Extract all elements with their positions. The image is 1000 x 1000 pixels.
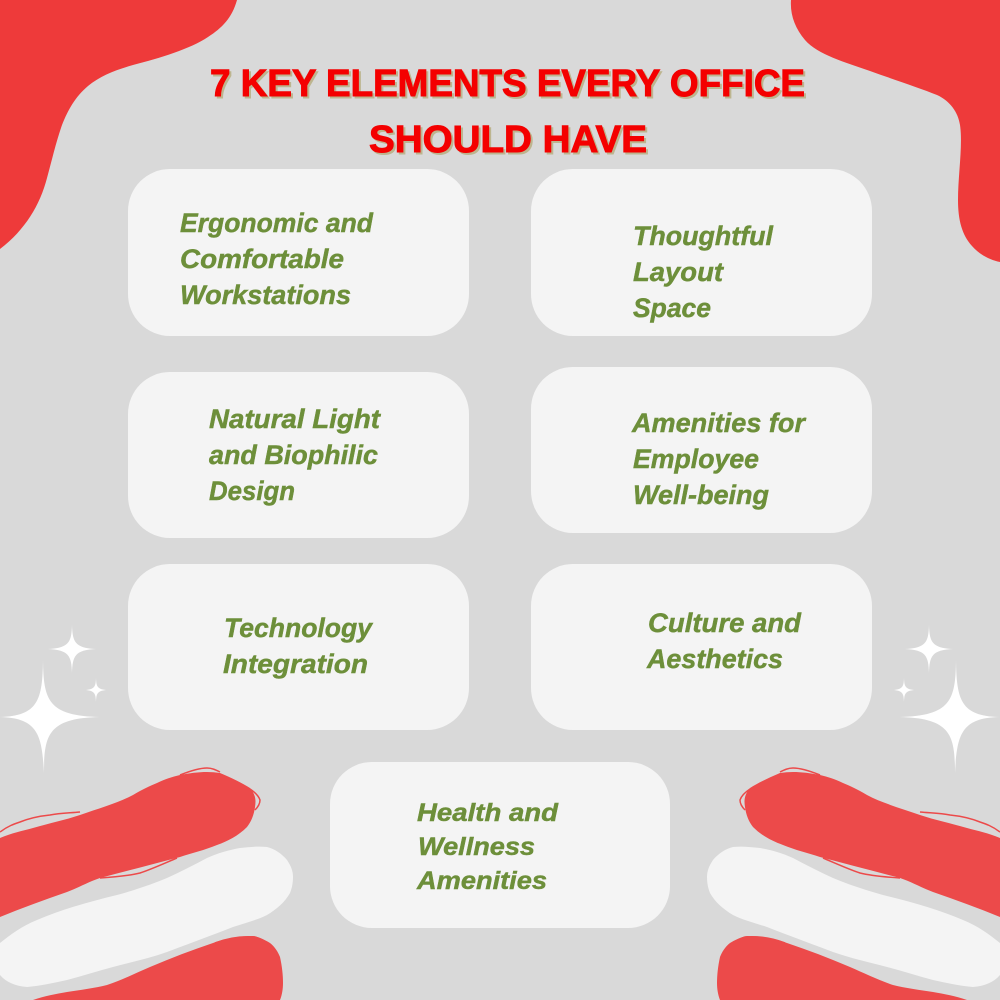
title bbox=[210, 63, 805, 161]
card: culture and aesthetics: Aesthetics bbox=[646, 644, 783, 674]
card: natural light bbox=[128, 372, 469, 538]
card: amenities for well-being: Amenities for bbox=[631, 408, 806, 438]
card: technology integration: Technology bbox=[224, 613, 374, 643]
card: culture and aesthetics bbox=[531, 564, 872, 730]
sparkles: left bbox=[0, 625, 106, 773]
card: thoughtful layout: Thoughtful bbox=[633, 221, 773, 251]
card: health and wellness bbox=[330, 762, 670, 928]
card: ergonomic workstations: Ergonomic and bbox=[180, 208, 373, 238]
blob: top right corner bbox=[791, 0, 1000, 262]
blob: top left corner bbox=[0, 0, 237, 249]
card: health and wellness: Amenities bbox=[416, 867, 547, 895]
card: ergonomic workstations bbox=[128, 169, 469, 336]
card: natural light: Natural Light bbox=[209, 404, 381, 434]
card: ergonomic workstations: Workstations bbox=[180, 280, 351, 310]
card: amenities for well-being: Well-being bbox=[633, 480, 769, 510]
card: thoughtful layout: Space bbox=[633, 293, 711, 323]
card: thoughtful layout: Layout bbox=[633, 257, 724, 287]
card: technology integration: Integration bbox=[223, 649, 368, 679]
title: 7 KEY ELEMENTS EVERY OFFICE bbox=[210, 63, 805, 105]
card: culture and aesthetics: Culture and bbox=[648, 608, 802, 638]
card: health and wellness: Wellness bbox=[418, 833, 535, 861]
title: SHOULD HAVE bbox=[369, 119, 647, 161]
card: natural light: Design bbox=[209, 476, 295, 506]
brush strokes: bottom right bbox=[707, 768, 1000, 1000]
brush strokes: bottom left bbox=[0, 768, 293, 1000]
card: ergonomic workstations: Comfortable bbox=[180, 244, 344, 274]
card: amenities for well-being bbox=[531, 367, 872, 533]
card: amenities for well-being: Employee bbox=[633, 444, 759, 474]
card: natural light: and Biophilic bbox=[209, 440, 378, 470]
card: thoughtful layout bbox=[531, 169, 872, 336]
card: technology integration bbox=[128, 564, 469, 730]
card: health and wellness: Health and bbox=[417, 799, 559, 827]
sparkles: right bbox=[894, 625, 999, 773]
